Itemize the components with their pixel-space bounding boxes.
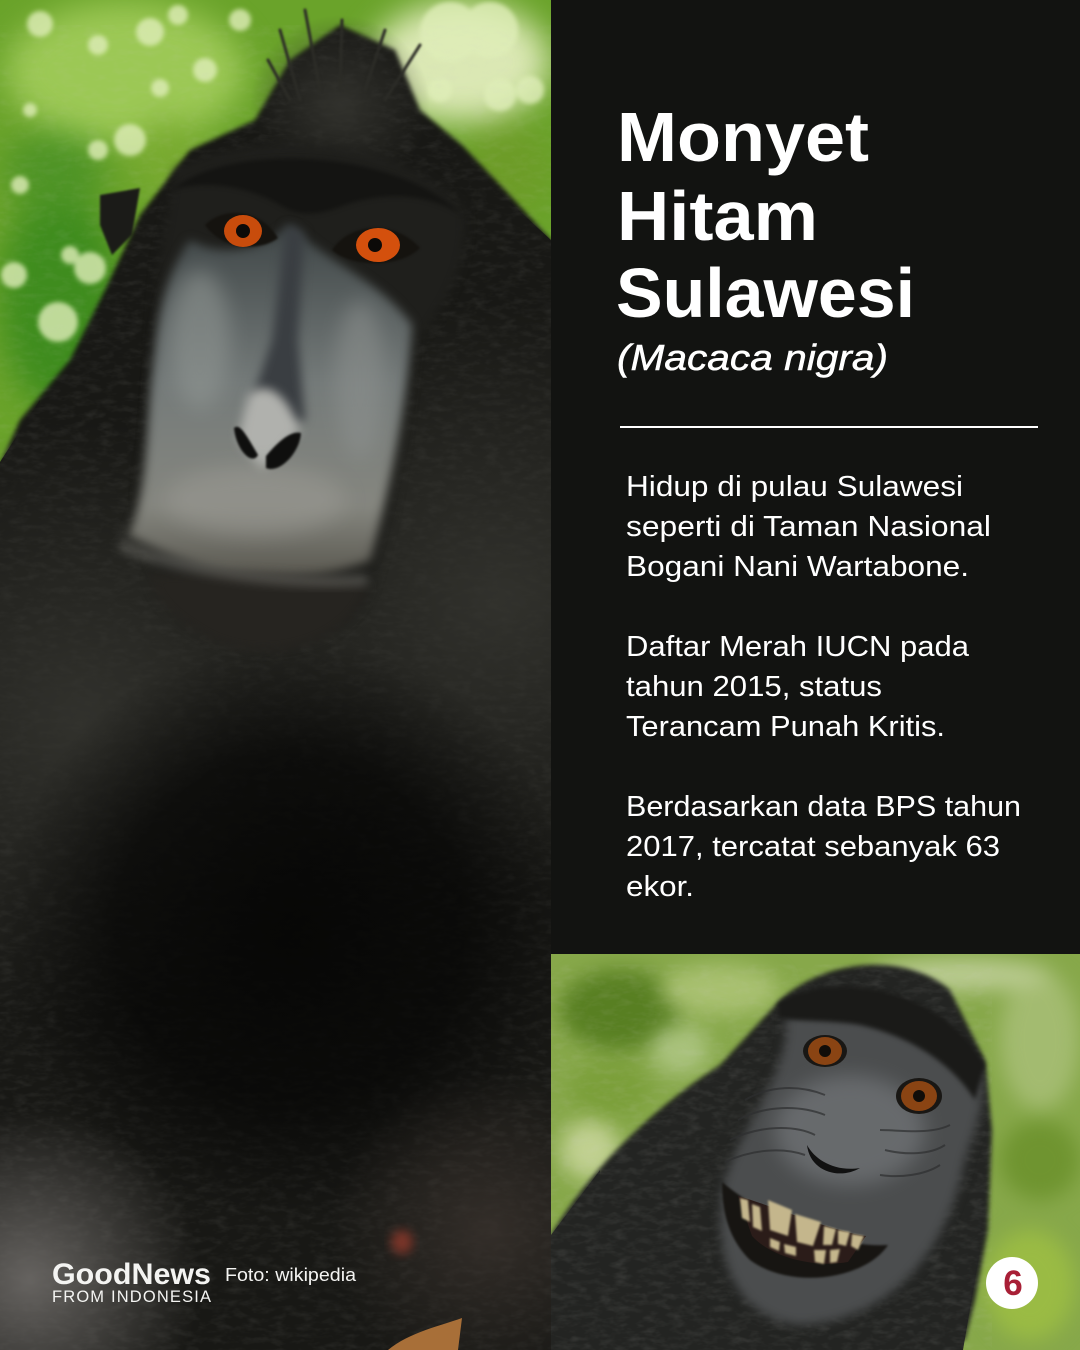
subtitle: scientific name: (Macaca nigra) <box>617 337 888 378</box>
divider <box>620 426 1038 428</box>
eye left <box>803 1035 847 1067</box>
nostrils <box>234 427 258 459</box>
mouth <box>722 1182 888 1278</box>
wrinkles <box>725 1088 950 1176</box>
face <box>116 150 426 626</box>
text block: IUCN status: tahun 2015, status <box>626 671 882 703</box>
page number badge <box>986 1257 1038 1309</box>
photo credit: Foto: wikipedia <box>225 1264 357 1285</box>
title: Monyet <box>617 98 869 176</box>
text block: IUCN status <box>626 631 970 743</box>
logo: GoodNews from Indonesia: GoodNews <box>52 1258 211 1291</box>
foliage <box>551 954 1080 1350</box>
text block: habitat: seperti di Taman Nasional <box>626 511 991 543</box>
photo: grinning macaque <box>551 954 1080 1350</box>
photo: black macaque close-up <box>0 0 551 1350</box>
foliage background <box>0 0 551 480</box>
logo: GoodNews from Indonesia: FROM INDONESIA <box>52 1288 211 1306</box>
crest hair <box>268 10 420 100</box>
monkey <box>551 965 992 1350</box>
nostrils <box>807 1145 860 1173</box>
brow <box>183 160 445 212</box>
text block: habitat: Bogani Nani Wartabone. <box>626 551 969 583</box>
page number badge: 6 <box>1003 1264 1023 1303</box>
text block: population: ekor. <box>626 871 694 903</box>
text block: IUCN status: Terancam Punah Kritis. <box>626 711 945 743</box>
muzzle chin <box>228 568 305 578</box>
title <box>616 98 915 332</box>
ear <box>100 188 140 255</box>
beard line <box>120 545 368 581</box>
leaf and scar <box>388 1318 462 1350</box>
logo: GoodNews from Indonesia <box>52 1258 211 1306</box>
eyes <box>205 213 420 263</box>
fur shading <box>0 15 551 1350</box>
text block: population: 2017, tercatat sebanyak 63 <box>626 831 1000 863</box>
text block: population: Berdasarkan data BPS tahun <box>626 791 1021 823</box>
title: Hitam <box>617 177 818 255</box>
text block: population <box>626 791 1021 903</box>
face <box>720 1001 983 1325</box>
text block: habitat <box>626 471 991 583</box>
text block: IUCN status: Daftar Merah IUCN pada <box>626 631 970 663</box>
monkey body <box>0 22 551 480</box>
eye right <box>896 1078 942 1114</box>
title: Sulawesi <box>616 254 915 332</box>
text block: habitat: Hidup di pulau Sulawesi <box>626 471 963 503</box>
fur texture <box>0 25 551 1350</box>
nose ridge <box>252 225 305 430</box>
